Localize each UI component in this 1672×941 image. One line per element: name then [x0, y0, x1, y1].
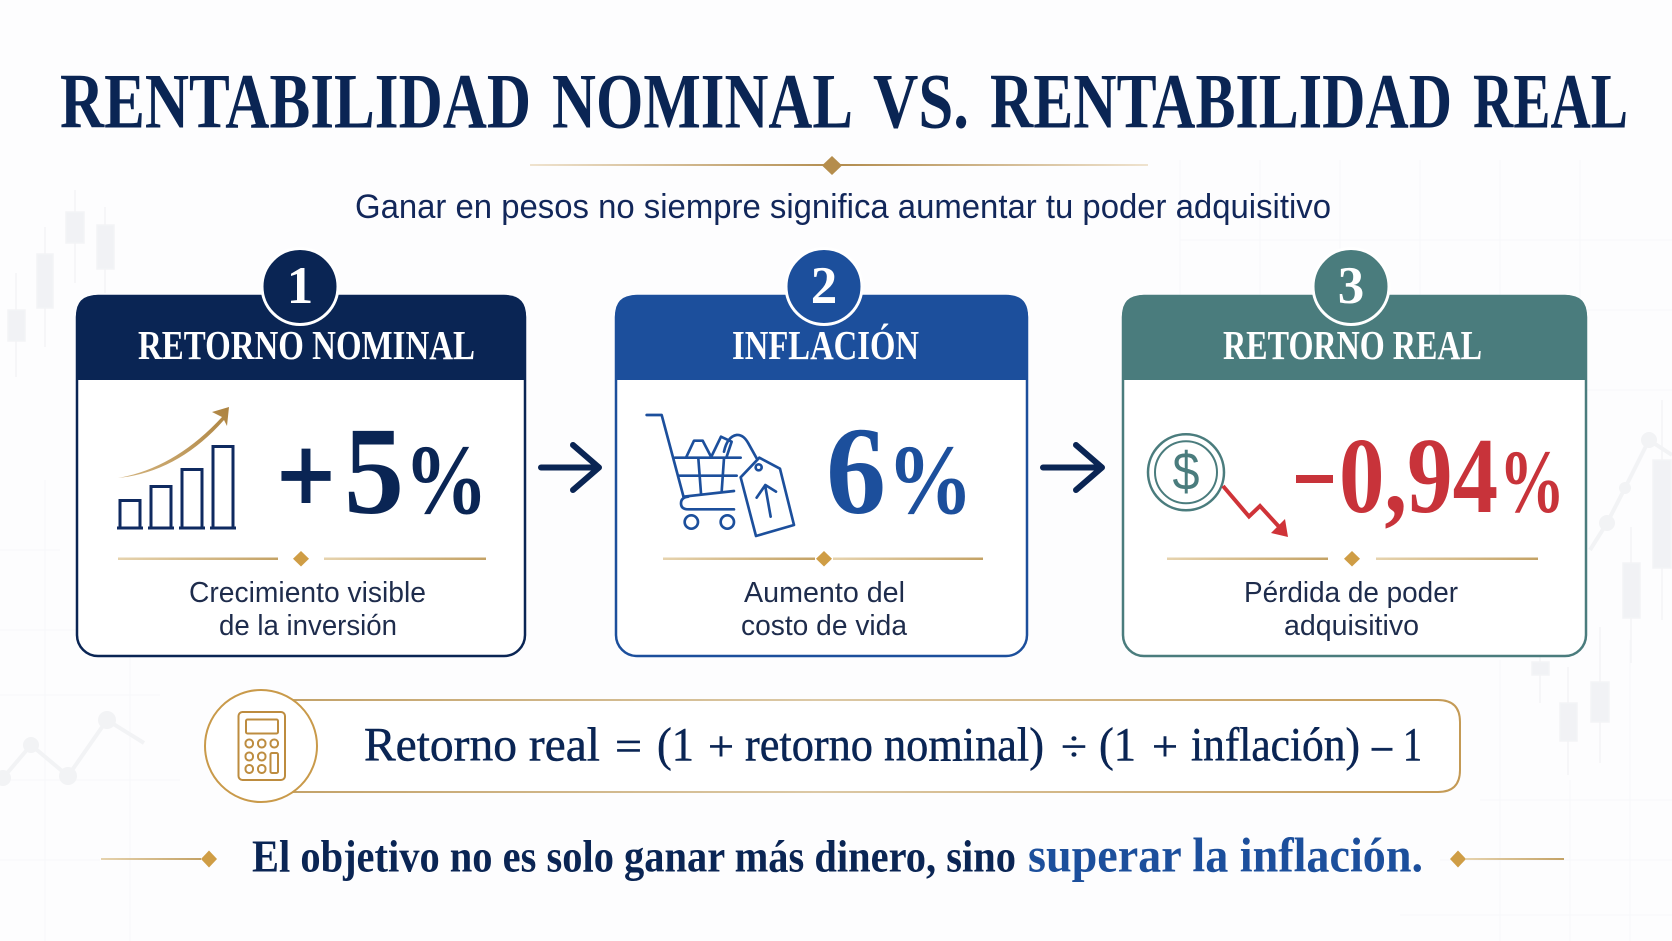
arrow: step 1 to step 2 [541, 445, 599, 490]
panel: retorno nominal [76, 248, 526, 656]
formula text: ÷ [1061, 724, 1087, 770]
panel: retorno real [1122, 248, 1587, 656]
icon: shopping cart with price tag [647, 415, 794, 536]
closing ornament left [101, 850, 217, 868]
caption: aumento: costo de vida [741, 610, 908, 642]
caption: crecimiento: Crecimiento visible [189, 577, 426, 609]
caption: pérdida: adquisitivo [1284, 610, 1419, 642]
closing statement: superar la inflación. [1028, 828, 1423, 882]
number badge 3 [1313, 248, 1389, 324]
panel header: retorno real: RETORNO REAL [1223, 322, 1482, 368]
caption: crecimiento [189, 577, 426, 642]
formula text: + [708, 724, 734, 770]
title divider with diamond [530, 156, 1148, 175]
panel header: retorno real [1122, 295, 1587, 380]
caption: aumento: Aumento del [744, 577, 905, 609]
title: NOMINAL [552, 58, 853, 144]
formula text: (1 [657, 718, 694, 772]
number badge 1: 1 [287, 257, 313, 315]
value: +5%: 5 [344, 403, 404, 541]
panel header: retorno nominal [76, 295, 526, 380]
caption: pérdida [1244, 577, 1458, 642]
arrow: step 2 to step 3 [1043, 445, 1102, 490]
value: +5%: + [277, 414, 335, 538]
formula text [364, 718, 1422, 772]
value: +5%: % [404, 424, 488, 535]
title: RENTABILIDAD [60, 58, 531, 144]
closing ornament right [1450, 850, 1564, 868]
icon: dollar coin with falling red arrow [1148, 434, 1288, 537]
caption: pérdida: Pérdida de poder [1244, 577, 1458, 609]
panel header: retorno nominal: RETORNO NOMINAL [138, 322, 475, 368]
closing statement [252, 828, 1423, 882]
number badge 1 [262, 248, 338, 324]
title [60, 58, 1628, 144]
formula text: (1 [1099, 718, 1136, 772]
caption: aumento [741, 577, 908, 642]
formula panel [205, 690, 1460, 802]
icon: dollar coin with falling red arrow: $ [1172, 442, 1200, 502]
title: RENTABILIDAD [990, 58, 1452, 144]
formula text: + [1152, 724, 1178, 770]
icon: rising bar chart with gold arrow [117, 407, 236, 528]
value: 6% [826, 403, 973, 541]
value: +5% [277, 403, 488, 541]
value: -0,94%: % [1499, 433, 1565, 532]
icon: calculator in gold circle [205, 690, 317, 802]
card divider [1167, 551, 1538, 566]
closing statement: El objetivo no es solo ganar más dinero, sino [252, 830, 1016, 882]
formula text: – [1371, 718, 1393, 772]
formula text: inflación) [1191, 718, 1360, 772]
formula text: Retorno real [364, 718, 600, 772]
value: 6%: % [887, 424, 973, 535]
formula text: retorno nominal) [745, 718, 1044, 772]
panel: inflación [615, 248, 1028, 656]
number badge 2 [786, 248, 862, 324]
panel header: inflación [615, 295, 1028, 380]
formula text: = [615, 724, 642, 770]
caption: crecimiento: de la inversión [219, 610, 397, 642]
panel header: inflación: INFLACIÓN [732, 322, 919, 368]
value: -0,94%: 0,94 [1339, 417, 1498, 536]
subtitle: Ganar en pesos no siempre significa aumentar tu poder adquisitivo [355, 188, 1331, 226]
number badge 3: 3 [1338, 257, 1364, 315]
card divider [663, 551, 983, 566]
title: VS. [873, 58, 969, 144]
number badge 2: 2 [811, 257, 837, 315]
value: 6%: 6 [826, 403, 886, 541]
card divider [118, 551, 486, 566]
formula text: 1 [1403, 718, 1422, 772]
